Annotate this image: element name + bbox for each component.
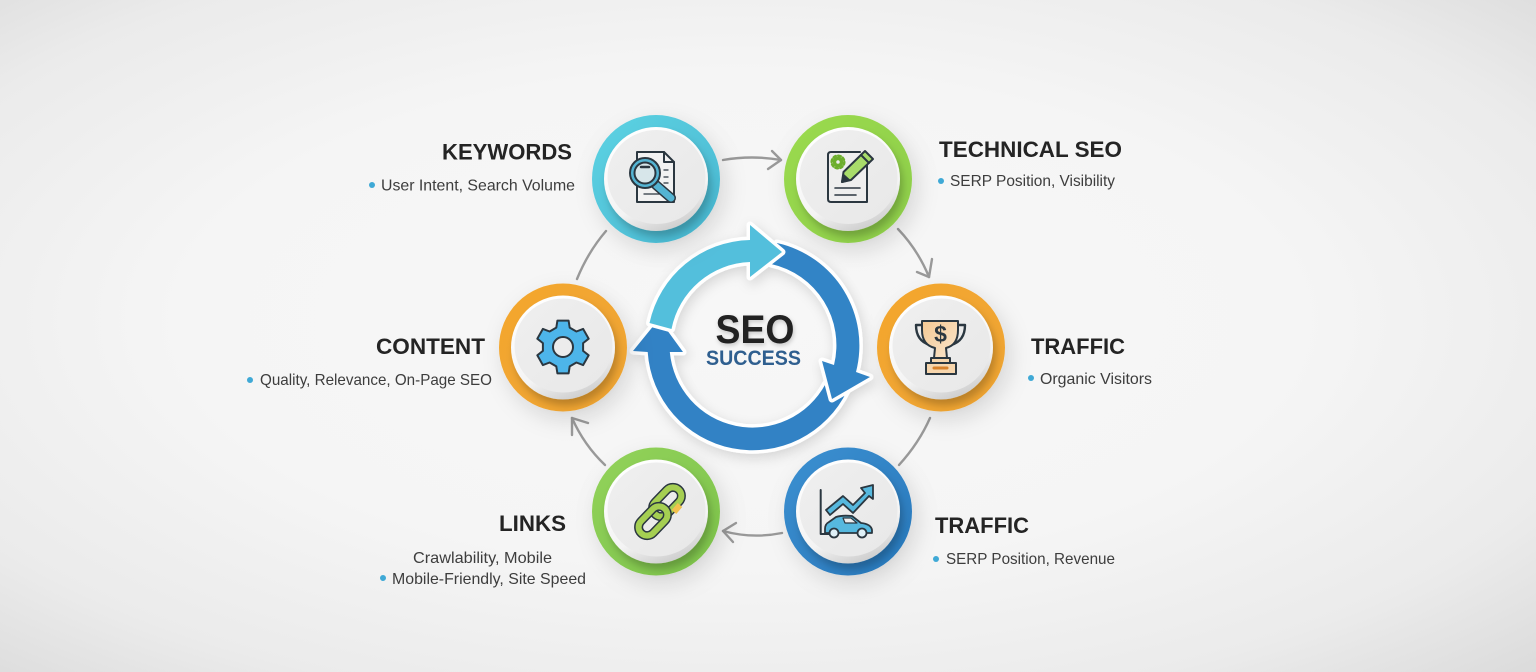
arrow: lower traffic to links: [723, 523, 782, 542]
connector: traffic to lower traffic: [899, 418, 930, 465]
node: links: [592, 448, 720, 576]
arrow: technical SEO to traffic: [898, 229, 932, 277]
label: traffic: [1028, 334, 1152, 388]
node: content: [499, 284, 627, 412]
connector: content to keywords: [577, 231, 606, 279]
node: keywords: [592, 115, 720, 243]
arrow: dark blue right arc: [771, 243, 870, 399]
label: content: Quality, Relevance, On-Page SEO: [260, 372, 492, 389]
label: keywords: KEYWORDS: [442, 140, 572, 164]
label: links: Crawlability, Mobile: [413, 550, 552, 567]
label: lower traffic: SERP Position, Revenue: [946, 551, 1115, 568]
label: content: CONTENT: [376, 334, 485, 359]
node: traffic trophy: [877, 284, 1005, 412]
label: links: [380, 511, 586, 588]
icon: document with magnifier: [630, 152, 674, 202]
central cycle arrows: [633, 225, 870, 450]
label: keywords: User Intent, Search Volume: [381, 178, 575, 194]
label: lower traffic: TRAFFIC: [935, 513, 1029, 538]
center title: SEO Success: SUCCESS: [706, 347, 801, 370]
label: keywords: [369, 140, 575, 194]
label: links: LINKS: [499, 511, 566, 536]
arrow: light blue top arc: [650, 225, 782, 329]
label: technical SEO: [938, 137, 1122, 190]
center title: SEO Success: [706, 308, 801, 370]
icon: chart and car: [821, 485, 873, 538]
label: lower traffic: [933, 513, 1115, 568]
arrow: keywords to technical SEO: [723, 151, 781, 169]
label: technical SEO: TECHNICAL SEO: [939, 137, 1122, 162]
icon: trophy: $: [934, 321, 947, 347]
label: traffic: TRAFFIC: [1031, 334, 1125, 359]
arrow: links to content: [572, 418, 605, 465]
node: traffic growth: [784, 448, 912, 576]
label: links: Mobile-Friendly, Site Speed: [392, 571, 586, 588]
label: traffic: Organic Visitors: [1040, 371, 1152, 388]
center title: SEO Success: SEO: [716, 308, 794, 352]
node: technical SEO: [784, 115, 912, 243]
icon: document with pencil and gear: [828, 151, 873, 202]
label: content: [247, 334, 492, 389]
icon: chain links: [635, 484, 685, 539]
icon: gear: [537, 321, 589, 373]
label: technical SEO: SERP Position, Visibility: [950, 173, 1115, 190]
arrow: blue bottom arc: [633, 319, 847, 450]
